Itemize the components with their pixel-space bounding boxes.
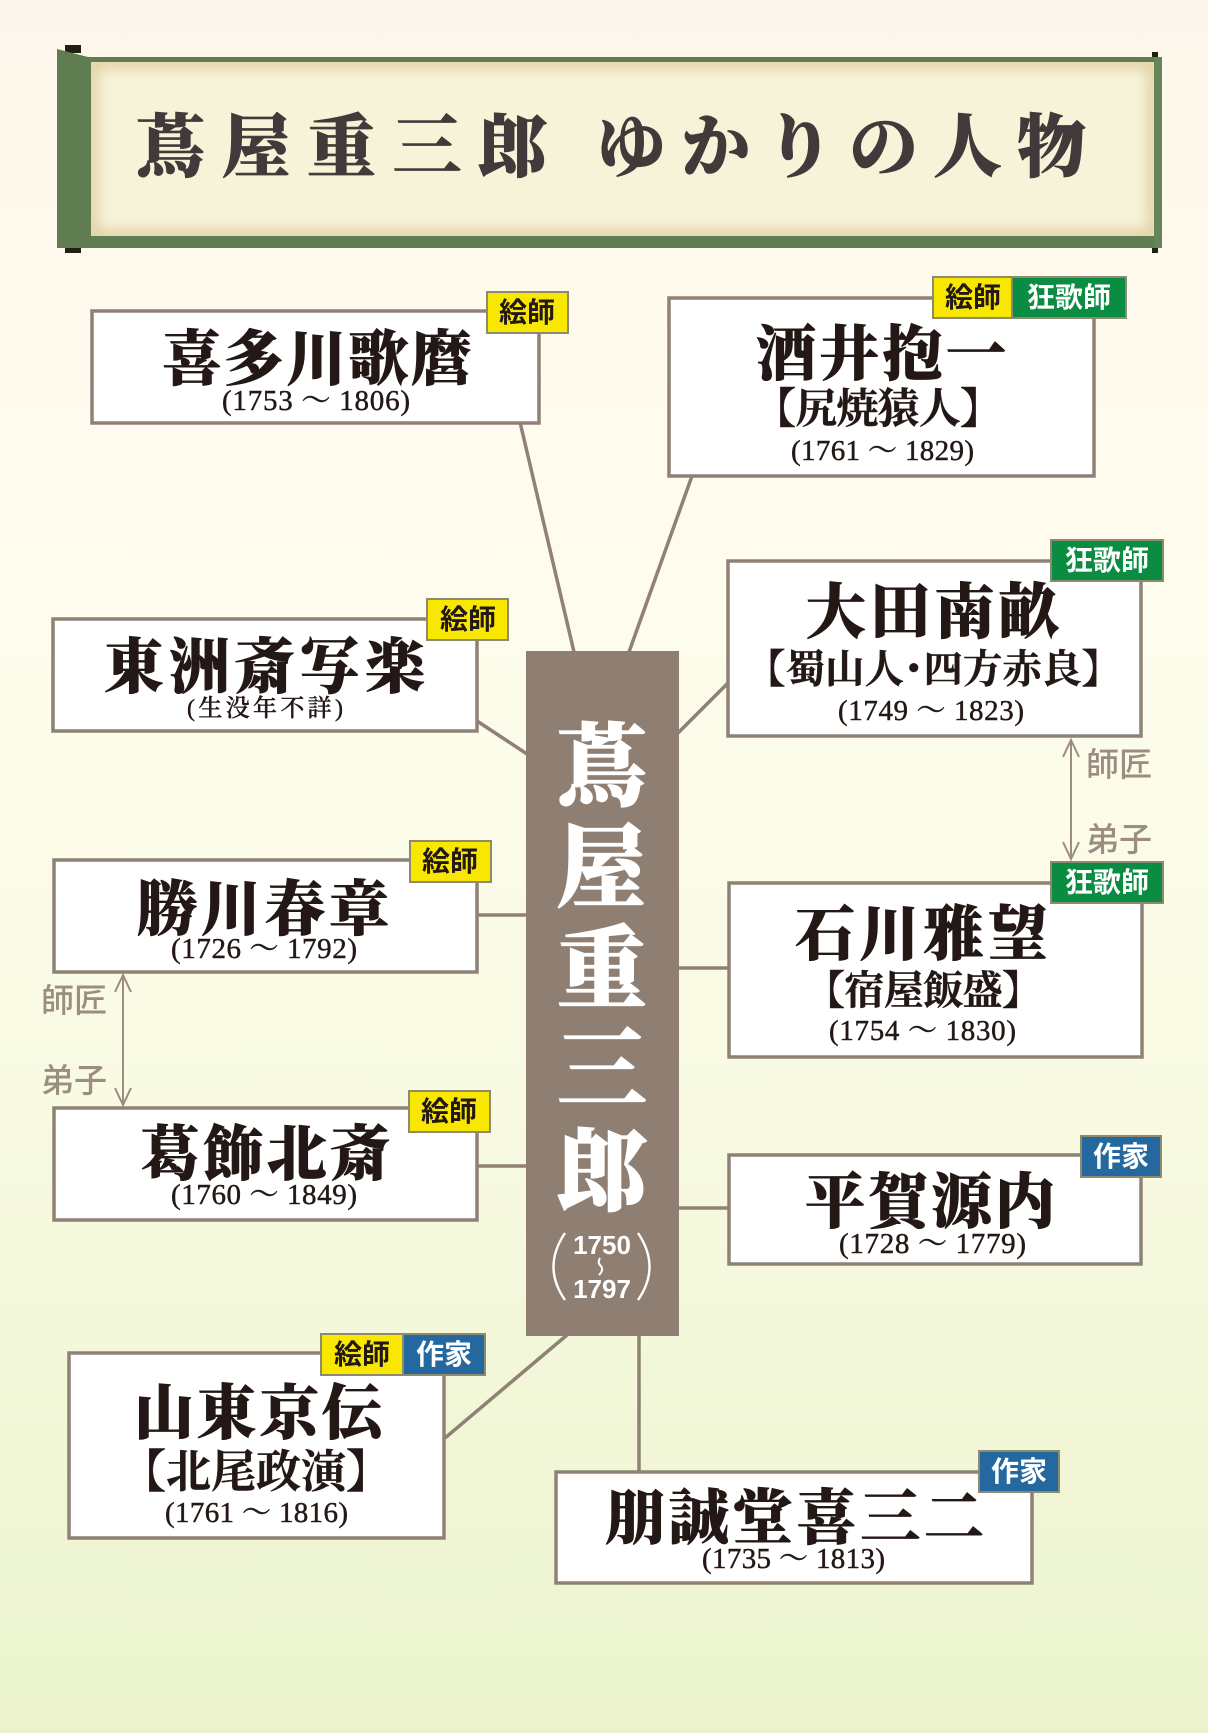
tag: 絵師: 絵師	[945, 282, 1001, 313]
birth and death years: 1750	[573, 1230, 631, 1260]
panel: 東洲斎写楽: 東洲斎写楽	[104, 635, 428, 701]
panel: 喜多川歌麿	[92, 292, 568, 423]
panel: 喜多川歌麿: 喜多川歌麿	[162, 327, 471, 393]
panel: 山東京伝: 山東京伝	[134, 1381, 389, 1447]
tag: 絵師	[933, 277, 1012, 318]
panel: 大田南畝: 大田南畝	[806, 580, 1059, 646]
tag: 絵師	[321, 1334, 403, 1375]
arrow: 師匠 to 弟子 left	[41, 975, 131, 1105]
connector lines	[445, 422, 729, 1472]
central panel: 蔦屋重三郎	[526, 651, 679, 1336]
arrow: 師匠 to 弟子 right	[1063, 740, 1152, 859]
title	[136, 110, 1086, 186]
panel: 朋誠堂喜三二: (1735 ～ 1813)	[702, 1543, 885, 1575]
birth and death years: 1797	[573, 1274, 631, 1304]
tag: 絵師	[427, 599, 508, 640]
tag: 作家	[1081, 1136, 1161, 1177]
panel: 石川雅望	[729, 862, 1163, 1057]
panel: 酒井抱一: 【尻焼猿人】	[754, 386, 1002, 433]
tag: 作家: 作家	[416, 1339, 472, 1370]
panel: 平賀源内	[729, 1136, 1161, 1264]
panel: 東洲斎写楽	[53, 599, 508, 731]
tag: 狂歌師	[1051, 540, 1163, 581]
central panel: 蔦屋重三郎: 重	[557, 921, 647, 1020]
panel: 朋誠堂喜三二	[556, 1451, 1059, 1583]
tag: 作家: 作家	[1093, 1141, 1149, 1172]
arrow: 師匠 to 弟子 left: 師匠	[41, 982, 107, 1019]
panel: 葛飾北斎	[54, 1091, 490, 1220]
panel: 酒井抱一: 酒井抱一	[756, 322, 1006, 388]
title: 蔦屋重三郎	[136, 110, 547, 186]
central panel: 蔦屋重三郎: 屋	[556, 820, 648, 919]
tag: 狂歌師: 狂歌師	[1065, 545, 1149, 576]
panel: 平賀源内: 平賀源内	[805, 1170, 1055, 1236]
panel: 酒井抱一	[669, 277, 1126, 476]
tag: 絵師	[410, 841, 491, 882]
tag: 狂歌師	[1051, 862, 1163, 903]
panel: 大田南畝	[728, 540, 1163, 736]
birth and death years	[554, 1230, 650, 1304]
panel: 大田南畝: (1749 ～ 1823)	[838, 695, 1024, 727]
panel: 朋誠堂喜三二: 朋誠堂喜三二	[605, 1486, 984, 1552]
tag: 絵師	[487, 292, 568, 333]
tag: 絵師: 絵師	[440, 604, 496, 635]
panel: 山東京伝	[69, 1334, 485, 1538]
tag: 作家	[403, 1334, 485, 1375]
panel: 勝川春章: (1726 ～ 1792)	[171, 933, 357, 965]
central panel: 蔦屋重三郎: 三	[557, 1023, 647, 1122]
panel: 葛飾北斎: 葛飾北斎	[140, 1122, 390, 1188]
central panel: 蔦屋重三郎: 郎	[557, 1124, 647, 1223]
panel: 山東京伝: 【北尾政演】	[121, 1447, 391, 1497]
panel: 平賀源内: (1728 ～ 1779)	[839, 1228, 1026, 1260]
title: ゆかりの人物	[597, 110, 1086, 186]
panel: 大田南畝: 【蜀山人・四方赤良】	[746, 648, 1121, 692]
panel: 勝川春章	[54, 841, 491, 972]
tag: 作家	[979, 1451, 1059, 1492]
tag: 絵師: 絵師	[334, 1339, 390, 1370]
tag: 狂歌師: 狂歌師	[1027, 282, 1111, 313]
panel: 喜多川歌麿: (1753 ～ 1806)	[222, 385, 410, 417]
tag: 狂歌師	[1012, 277, 1126, 318]
tag: 作家: 作家	[991, 1456, 1047, 1487]
panel: 石川雅望: 【宿屋飯盛】	[805, 968, 1042, 1013]
central panel: 蔦屋重三郎: 蔦	[557, 719, 647, 818]
tag: 狂歌師: 狂歌師	[1065, 867, 1149, 898]
panel: 酒井抱一: (1761 ～ 1829)	[791, 435, 974, 467]
arrow: 師匠 to 弟子 right: 弟子	[1086, 821, 1152, 858]
scroll banner	[57, 45, 1162, 253]
panel: 石川雅望: (1754 ～ 1830)	[829, 1015, 1016, 1047]
panel: 勝川春章: 勝川春章	[137, 877, 389, 943]
tag: 絵師	[409, 1091, 490, 1132]
panel: 葛飾北斎: (1760 ～ 1849)	[171, 1179, 357, 1211]
arrow: 師匠 to 弟子 right: 師匠	[1086, 746, 1152, 783]
tag: 絵師: 絵師	[422, 846, 478, 877]
panel: 東洲斎写楽: (生没年不詳)	[187, 695, 343, 722]
arrow: 師匠 to 弟子 left: 弟子	[41, 1062, 107, 1099]
tag: 絵師: 絵師	[421, 1096, 477, 1127]
tag: 絵師: 絵師	[499, 297, 555, 328]
panel: 山東京伝: (1761 ～ 1816)	[165, 1497, 348, 1529]
panel: 石川雅望: 石川雅望	[795, 902, 1048, 968]
